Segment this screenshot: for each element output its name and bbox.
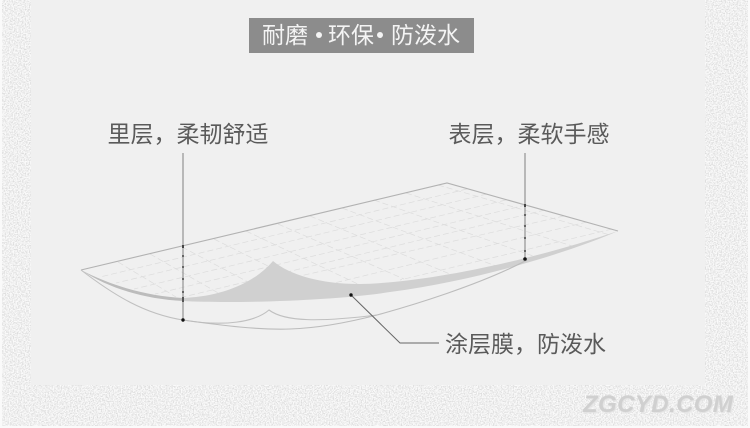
grid lines on top surface (100, 185, 612, 297)
label: outer layer: 表层，柔软手感 (448, 121, 610, 147)
title banner: 防泼水 (391, 22, 460, 48)
label: inner layer: 里层，柔韧舒适 (108, 121, 268, 147)
fabric diagram (81, 153, 618, 343)
leader: coating film (349, 293, 439, 343)
watermark: ZGCYD.COM (583, 391, 733, 418)
leader: inner layer (181, 153, 185, 322)
gray coating layer (183, 231, 618, 302)
title banner: 耐磨 (262, 22, 308, 48)
label: coating film: 涂层膜，防泼水 (445, 331, 606, 357)
leader: outer layer (523, 153, 527, 261)
title banner (249, 18, 474, 53)
top surface outline (81, 183, 618, 270)
bottom layer outline (81, 270, 377, 323)
left band of coating (81, 270, 183, 301)
title banner: 环保 (328, 22, 374, 48)
